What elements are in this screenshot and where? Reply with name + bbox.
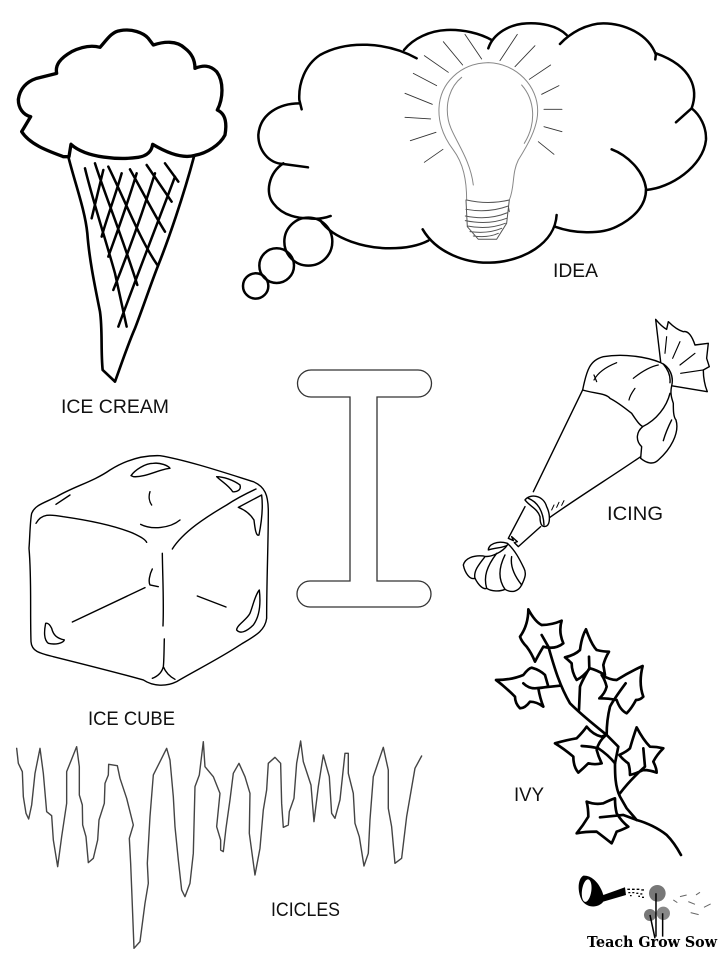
label: icing: ICING — [607, 503, 663, 525]
light bulb — [439, 63, 538, 239]
icon: thought cloud with light bulb — [243, 23, 706, 299]
label: idea: IDEA — [553, 260, 598, 282]
logo: Teach Grow Sow — [579, 876, 718, 951]
icon: icicles — [17, 741, 422, 948]
label: icicles: ICICLES — [271, 899, 340, 921]
thought cloud outline — [243, 23, 706, 299]
icon: ivy branch — [496, 609, 681, 855]
label: ice cube: ICE CUBE — [88, 708, 175, 730]
icon: watering can and dandelions — [579, 876, 711, 938]
icon: ice cube — [29, 456, 268, 685]
icon: piping bag with icing — [463, 319, 709, 591]
label: ice cream: ICE CREAM — [61, 396, 169, 418]
letter I outline — [297, 370, 432, 607]
logo text: Teach Grow Sow — [587, 933, 718, 951]
light rays — [405, 34, 562, 162]
icon: ice cream cone — [18, 30, 226, 382]
label: ivy: IVY — [514, 784, 544, 806]
